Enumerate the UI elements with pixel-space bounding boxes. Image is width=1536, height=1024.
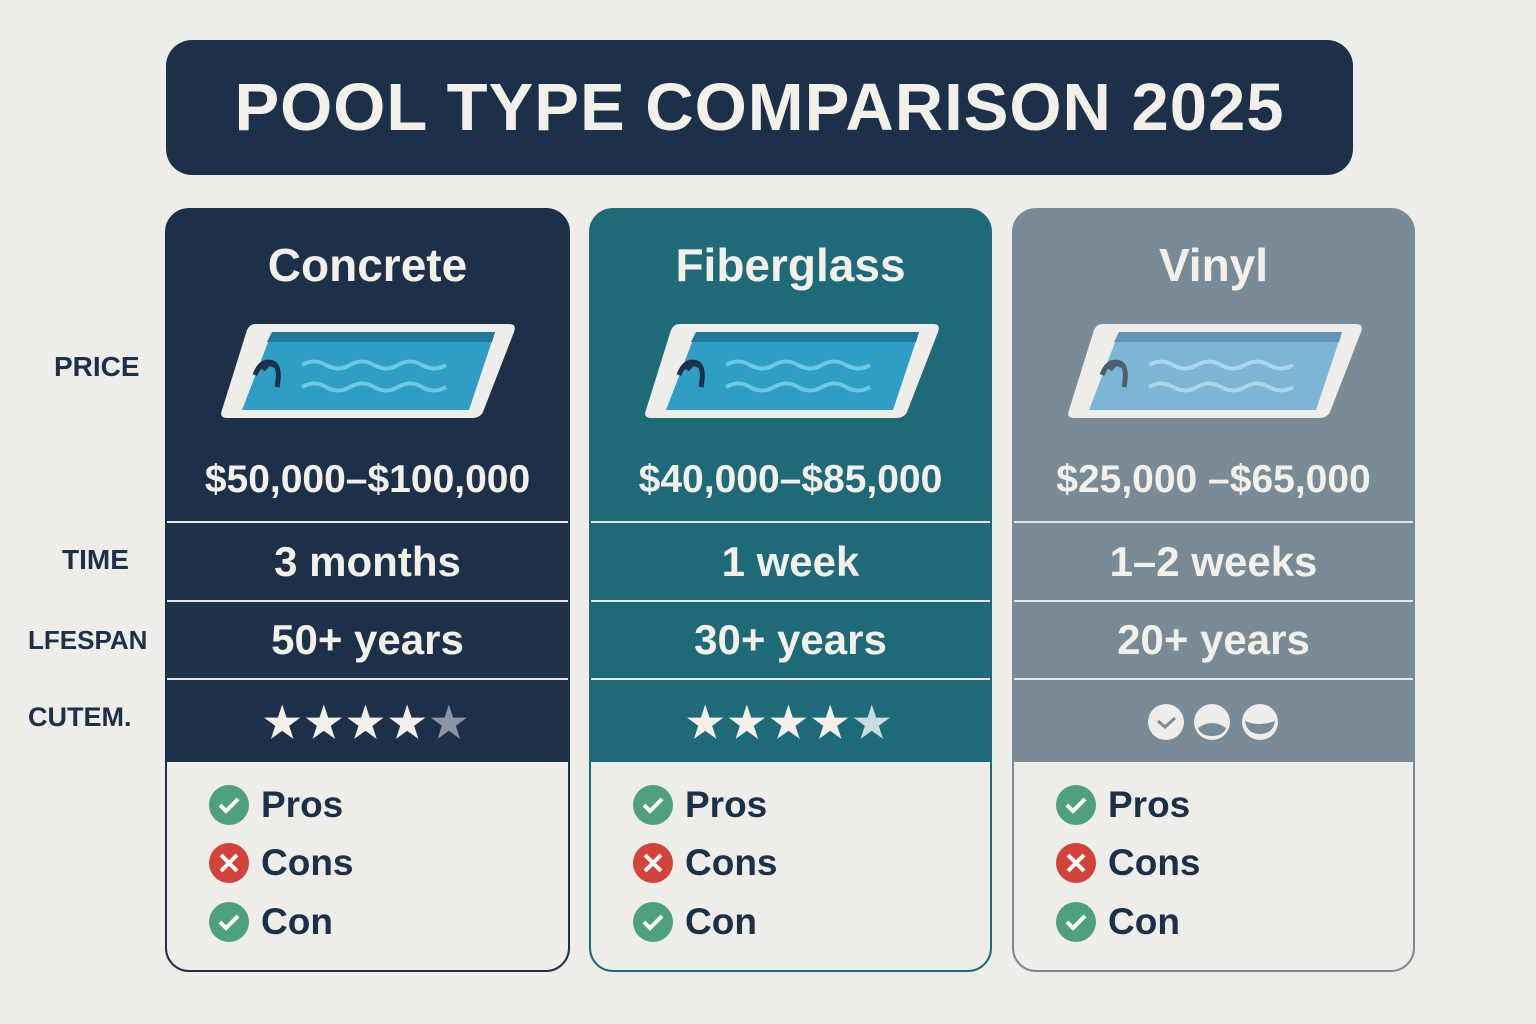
time: 1–2 weeks [1110,538,1317,584]
lifespan [1014,600,1413,678]
label: rating: CUTEM. [28,702,132,732]
rating icons [1014,678,1413,764]
rating stars [591,678,990,764]
label: time: TIME [62,544,129,575]
con [1056,901,1180,942]
cons: Cons [261,842,354,883]
pros: Pros [261,784,343,825]
pros/cons [167,762,568,974]
title [166,40,1353,175]
lifespan: 50+ years [271,616,464,663]
cons [1056,842,1200,883]
concrete header [205,239,530,501]
rating stars: ★★★★ [686,698,853,746]
rating stars: ★ [853,698,895,746]
lifespan [591,600,990,678]
fiberglass header: Fiberglass [675,239,906,291]
concrete header: Concrete [268,239,467,291]
pros [209,784,343,825]
lifespan: 20+ years [1117,616,1310,663]
label: lifespan: LFESPAN [28,625,147,655]
vinyl header: $25,000 –$65,000 [1056,458,1371,501]
con: Con [685,901,757,942]
time: 1 week [722,538,859,584]
icon: pool [1068,324,1362,418]
panel: concrete [165,208,570,972]
pros: Pros [1108,784,1190,825]
cons [633,842,778,883]
rating stars [167,678,568,764]
time [591,521,990,600]
con [209,901,333,942]
time [1014,521,1413,600]
pros: Pros [685,784,767,825]
con: Con [261,901,333,942]
time: 3 months [274,538,461,584]
cons [209,842,354,883]
icon: pool [645,324,939,418]
panel: vinyl [1012,208,1415,972]
con [633,901,757,942]
time [167,521,568,600]
rating stars: ★ [430,698,472,746]
title: POOL TYPE COMPARISON 2025 [234,70,1285,145]
pros/cons [591,762,990,974]
concrete header: $50,000–$100,000 [205,458,530,501]
vinyl header: Vinyl [1159,239,1268,291]
icon: pool [221,324,515,418]
cons: Cons [1108,842,1200,883]
pros [633,784,767,825]
pros/cons [1014,762,1413,974]
label: price: PRICE [54,351,140,382]
lifespan [167,600,568,678]
vinyl header [1056,239,1371,501]
pros [1056,784,1190,825]
con: Con [1108,901,1180,942]
cons: Cons [685,842,778,883]
panel: fiberglass [589,208,992,972]
lifespan: 30+ years [694,616,887,663]
fiberglass header: $40,000–$85,000 [639,458,942,501]
fiberglass header [639,239,942,501]
rating stars: ★★★★ [263,698,430,746]
